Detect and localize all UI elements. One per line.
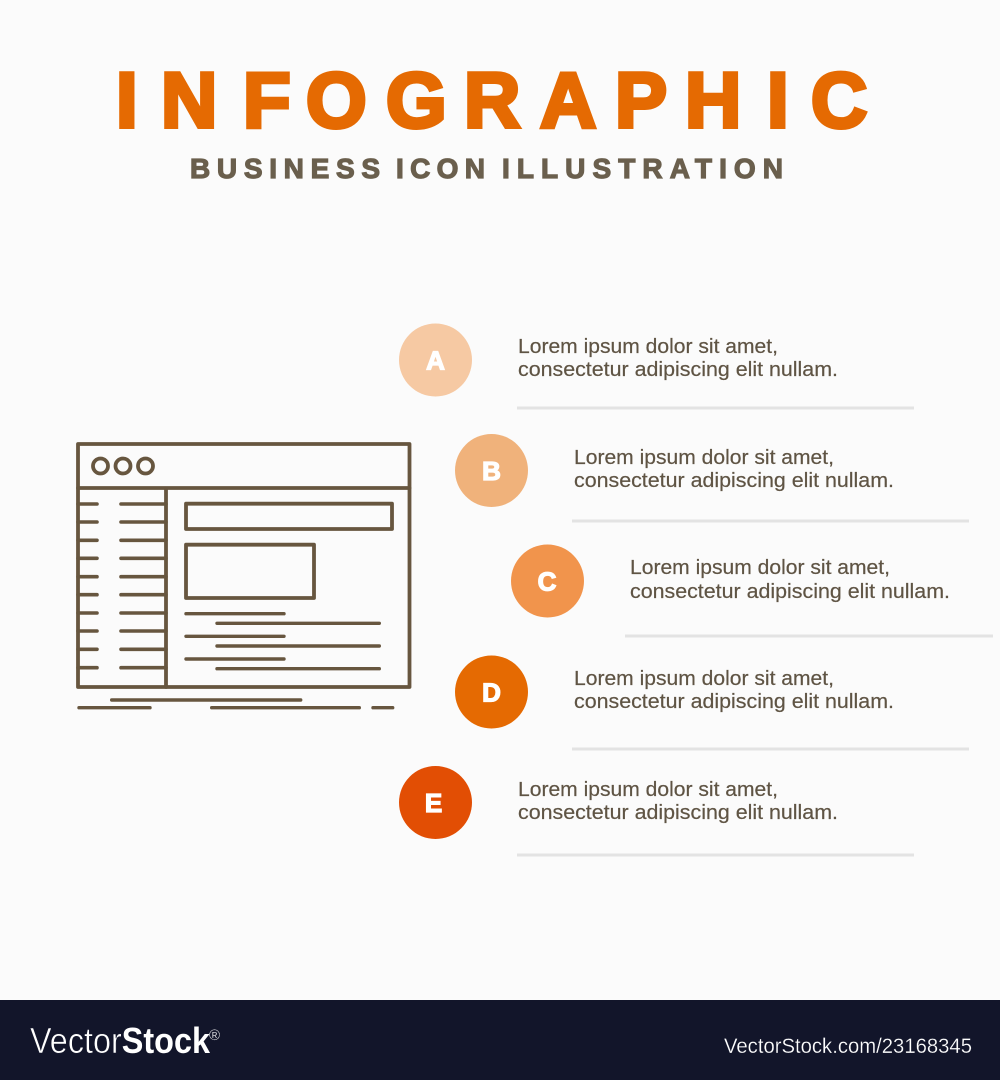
- title: INFOGRAPHIC: [116, 56, 867, 144]
- step E: consectetur adipiscing elit nullam.: [518, 801, 838, 824]
- step B: [455, 434, 969, 522]
- footer bar: VectorStock: [30, 1020, 211, 1061]
- step D: consectetur adipiscing elit nullam.: [574, 690, 894, 713]
- footer bar: ®: [209, 1027, 220, 1044]
- subtitle: ICON: [396, 153, 485, 184]
- step A: Lorem ipsum dolor sit amet,: [518, 335, 778, 358]
- subtitle: [190, 153, 783, 184]
- step C: Lorem ipsum dolor sit amet,: [630, 556, 890, 579]
- footer bar: [0, 1000, 1000, 1080]
- step C: [511, 544, 993, 638]
- step E: Lorem ipsum dolor sit amet,: [518, 778, 778, 801]
- step B: B: [482, 456, 501, 486]
- step B: Lorem ipsum dolor sit amet,: [574, 446, 834, 469]
- subtitle: BUSINESS: [190, 153, 380, 184]
- step D: D: [482, 678, 501, 708]
- step A: [399, 324, 914, 410]
- step C: C: [538, 566, 557, 596]
- step B: consectetur adipiscing elit nullam.: [574, 469, 894, 492]
- step E: [399, 766, 914, 856]
- step A: consectetur adipiscing elit nullam.: [518, 358, 838, 381]
- step D: Lorem ipsum dolor sit amet,: [574, 667, 834, 690]
- step C: consectetur adipiscing elit nullam.: [630, 580, 950, 603]
- step A: A: [426, 346, 445, 376]
- step D: [455, 656, 969, 750]
- subtitle: ILLUSTRATION: [502, 153, 783, 184]
- footer bar: VectorStock.com/23168345: [724, 1035, 972, 1058]
- step E: E: [425, 788, 442, 818]
- icon: browser window wireframe: [78, 444, 410, 708]
